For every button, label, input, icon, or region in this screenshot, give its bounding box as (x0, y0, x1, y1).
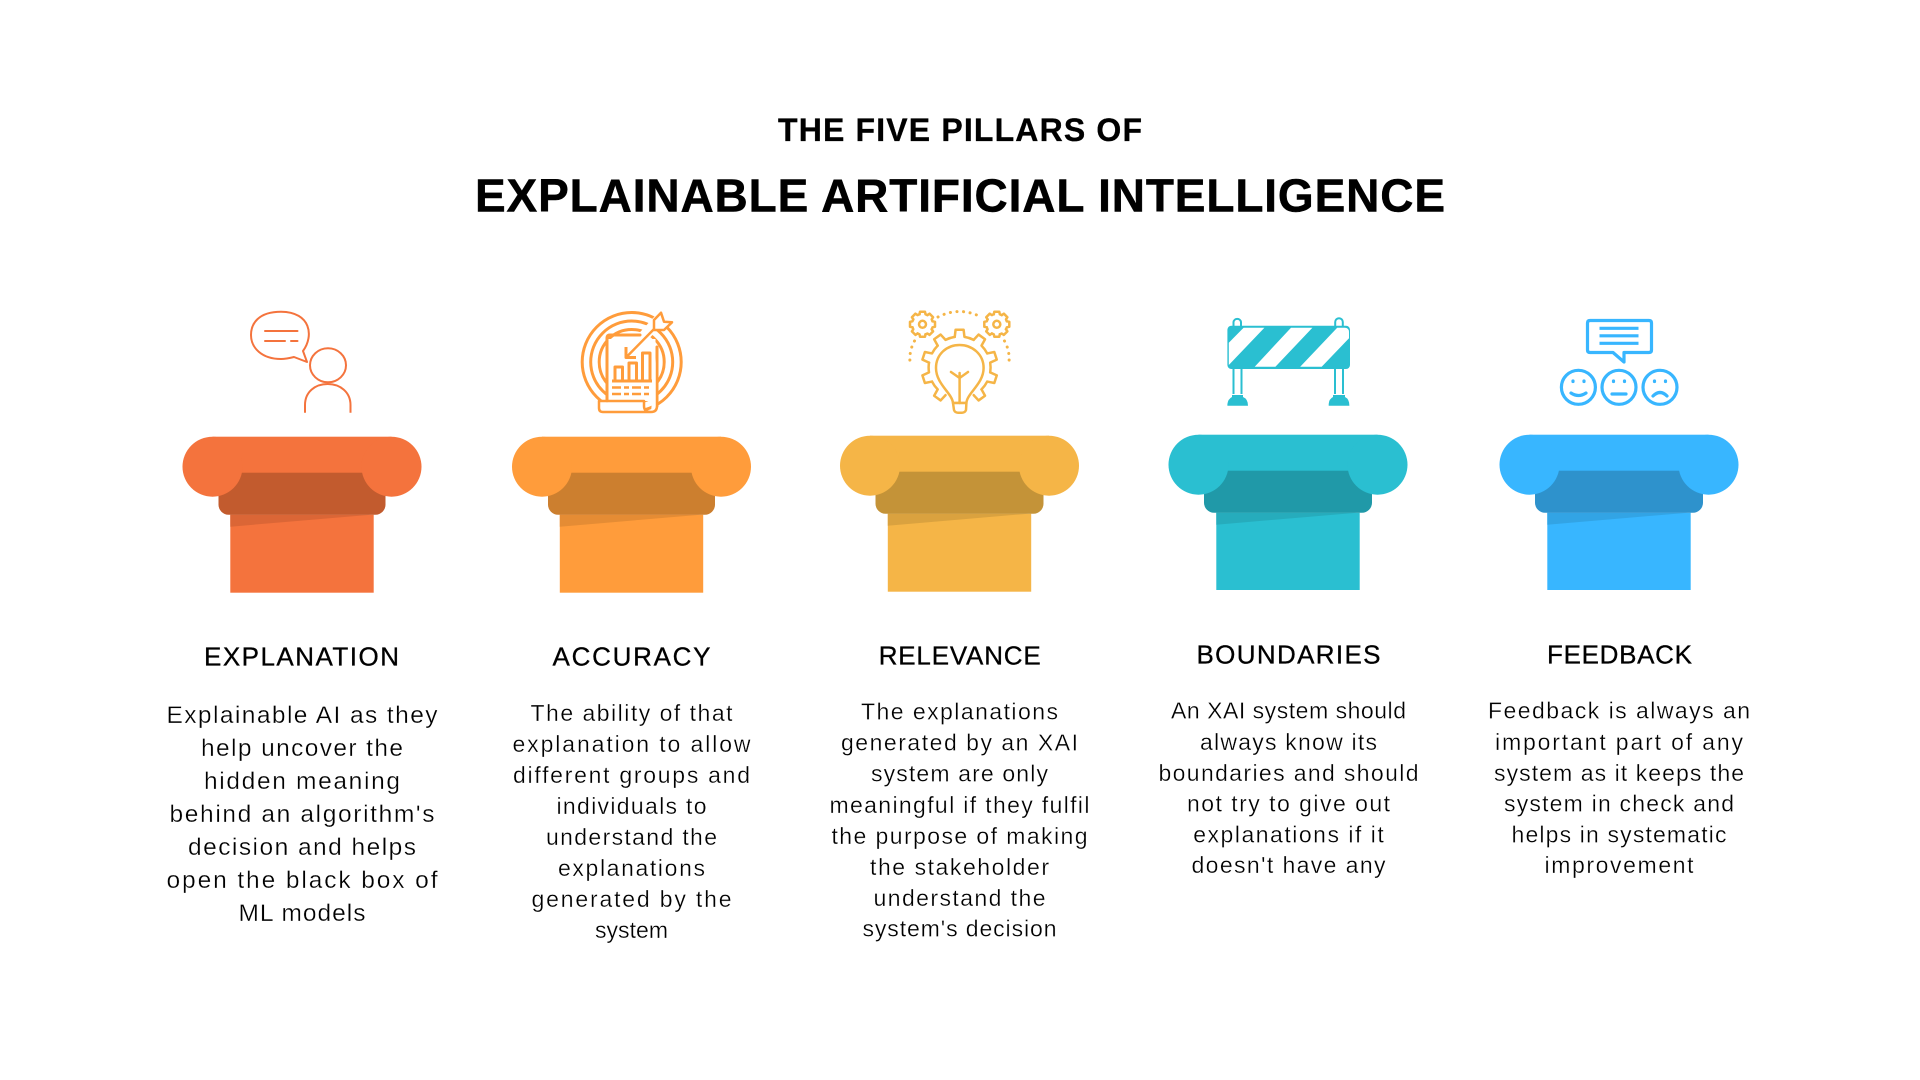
title line 2: EXPLAINABLE ARTIFICIAL INTELLIGENCE (475, 170, 1445, 222)
body: accuracy: The ability of that (530, 700, 733, 726)
body: boundaries: doesn't have any (1192, 852, 1386, 878)
body: accuracy: understand the (546, 824, 717, 850)
pillar 4: boundaries (1168, 435, 1408, 590)
body: boundaries: always know its (1200, 729, 1377, 755)
icon: light bulb in gear (910, 312, 1009, 413)
right cog (984, 312, 1009, 337)
body: boundaries: boundaries and should (1158, 760, 1418, 786)
body: boundaries (1158, 698, 1418, 878)
body: explanation: ML models (238, 900, 366, 927)
happy face (1561, 370, 1595, 404)
column text: boundaries (1158, 640, 1418, 878)
column text: feedback (1488, 640, 1750, 878)
body: explanation: hidden meaning (204, 768, 400, 795)
title (475, 112, 1445, 222)
heading: relevance: RELEVANCE (879, 641, 1041, 671)
feedback speech bubble (1588, 320, 1652, 362)
barrier feet (1227, 395, 1349, 406)
body: feedback: improvement (1544, 852, 1694, 878)
icon: road barrier (1227, 318, 1350, 406)
body: relevance (830, 698, 1090, 942)
pillar 1: explanation (182, 437, 422, 593)
body: relevance: system's decision (862, 916, 1056, 942)
body: boundaries: explanations if it (1193, 821, 1384, 847)
body: explanation: Explainable AI as they (166, 702, 438, 729)
body: feedback: system as it keeps the (1494, 760, 1744, 786)
body: feedback (1488, 698, 1750, 878)
icon: person with speech bubble (251, 312, 350, 413)
body: accuracy (512, 700, 751, 943)
body: accuracy: system (595, 917, 668, 943)
body: relevance: system are only (871, 761, 1048, 787)
body: feedback: helps in systematic (1512, 821, 1726, 847)
body: explanation: open the black box of (166, 867, 438, 894)
body: accuracy: different groups and (513, 762, 750, 788)
body: feedback: system in check and (1504, 791, 1734, 817)
barrier board (1227, 326, 1350, 369)
bulb (936, 345, 984, 403)
body: accuracy: explanation to allow (512, 731, 751, 757)
main gear (919, 329, 1000, 401)
heading: feedback: FEEDBACK (1547, 640, 1693, 670)
heading: boundaries: BOUNDARIES (1196, 640, 1380, 670)
left cog (910, 312, 935, 337)
dotted arcs (910, 312, 1009, 362)
icon: feedback bubble and faces (1561, 320, 1677, 404)
body: relevance: The explanations (861, 698, 1058, 724)
body: relevance: understand the (874, 885, 1046, 911)
pillar 3: relevance (840, 436, 1079, 592)
column text: relevance (830, 641, 1090, 942)
column text: explanation (166, 642, 438, 927)
body: feedback: Feedback is always an (1488, 698, 1750, 724)
body: explanation: behind an algorithm's (170, 801, 434, 828)
body: boundaries: An XAI system should (1171, 698, 1406, 724)
body: boundaries: not try to give out (1187, 791, 1391, 817)
heading: accuracy: ACCURACY (552, 642, 710, 672)
body: accuracy: explanations (558, 855, 705, 881)
title line 1: THE FIVE PILLARS OF (778, 112, 1142, 148)
heading: explanation: EXPLANATION (204, 642, 399, 672)
barrier stripes (1229, 328, 1349, 367)
body: relevance: generated by an XAI (841, 730, 1078, 756)
pillar 2: accuracy (512, 437, 751, 593)
body: relevance: meaningful if they fulfil (830, 792, 1090, 818)
body: explanation: help uncover the (201, 735, 403, 762)
body: relevance: the stakeholder (870, 854, 1049, 880)
barrier legs (1234, 369, 1343, 394)
barrier rings (1234, 318, 1343, 326)
column text: accuracy (512, 642, 751, 943)
body: relevance: the purpose of making (832, 823, 1088, 849)
body: feedback: important part of any (1495, 729, 1744, 755)
body: explanation (166, 702, 438, 927)
body: accuracy: individuals to (556, 793, 706, 819)
body: accuracy: generated by the (532, 886, 732, 912)
icon: target with chart document (582, 310, 681, 412)
body: explanation: decision and helps (188, 834, 416, 861)
neutral face (1602, 370, 1636, 404)
sad face (1643, 370, 1677, 404)
pillar 5: feedback (1500, 435, 1738, 590)
